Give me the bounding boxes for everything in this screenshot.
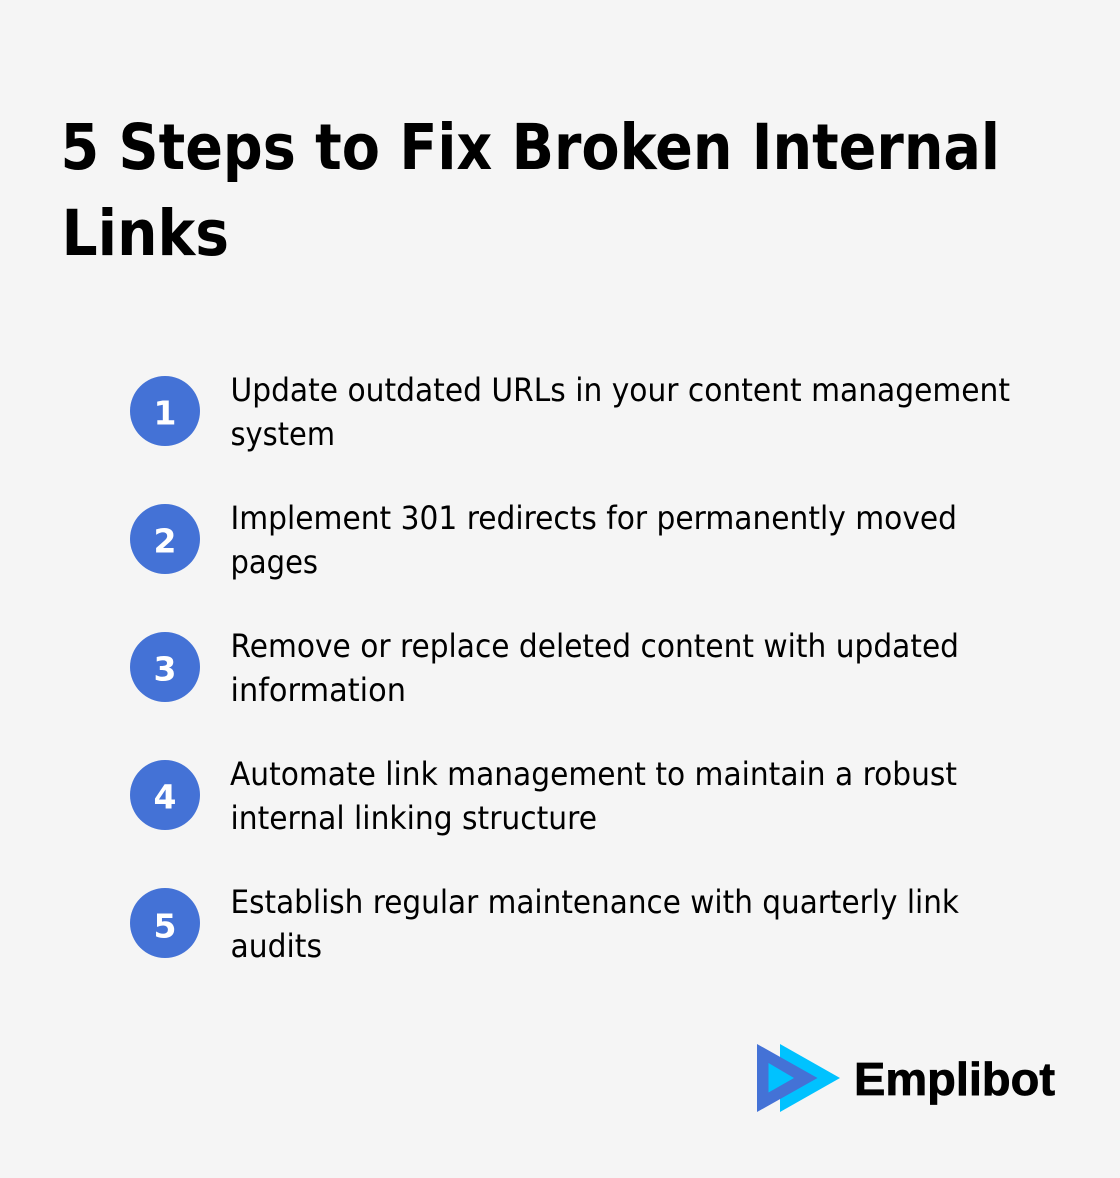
step 4: Automate link management to maintain a robust xyxy=(230,755,957,793)
step 5: Establish regular maintenance with quarterly link xyxy=(230,883,959,921)
title xyxy=(60,111,1000,270)
logo wordmark: Emplibot xyxy=(854,1053,1055,1105)
step 5: audits xyxy=(230,927,322,965)
step 3: information xyxy=(230,671,406,709)
step 2: 2 xyxy=(154,522,176,560)
step 5 xyxy=(130,883,959,965)
step 2: Implement 301 redirects for permanently moved xyxy=(230,499,957,537)
step 1 xyxy=(130,371,1010,453)
title: Links xyxy=(62,197,229,270)
step 2: pages xyxy=(230,543,318,581)
step 3: Remove or replace deleted content with updated xyxy=(230,627,959,665)
step 4 xyxy=(130,755,957,837)
step 3: 3 xyxy=(154,650,176,688)
step 4: internal linking structure xyxy=(230,799,597,837)
step 1: Update outdated URLs in your content management xyxy=(230,371,1010,409)
step 1: 1 xyxy=(154,394,176,432)
icon: play triangles xyxy=(757,1044,840,1112)
step 3 xyxy=(130,627,959,709)
step list xyxy=(130,371,1010,965)
step 4: 4 xyxy=(154,778,176,816)
logo: Emplibot xyxy=(757,1044,1055,1112)
step 5: 5 xyxy=(154,906,176,946)
step 2 xyxy=(130,499,957,581)
step 1: system xyxy=(230,415,335,453)
title: 5 Steps to Fix Broken Internal xyxy=(60,111,1000,184)
